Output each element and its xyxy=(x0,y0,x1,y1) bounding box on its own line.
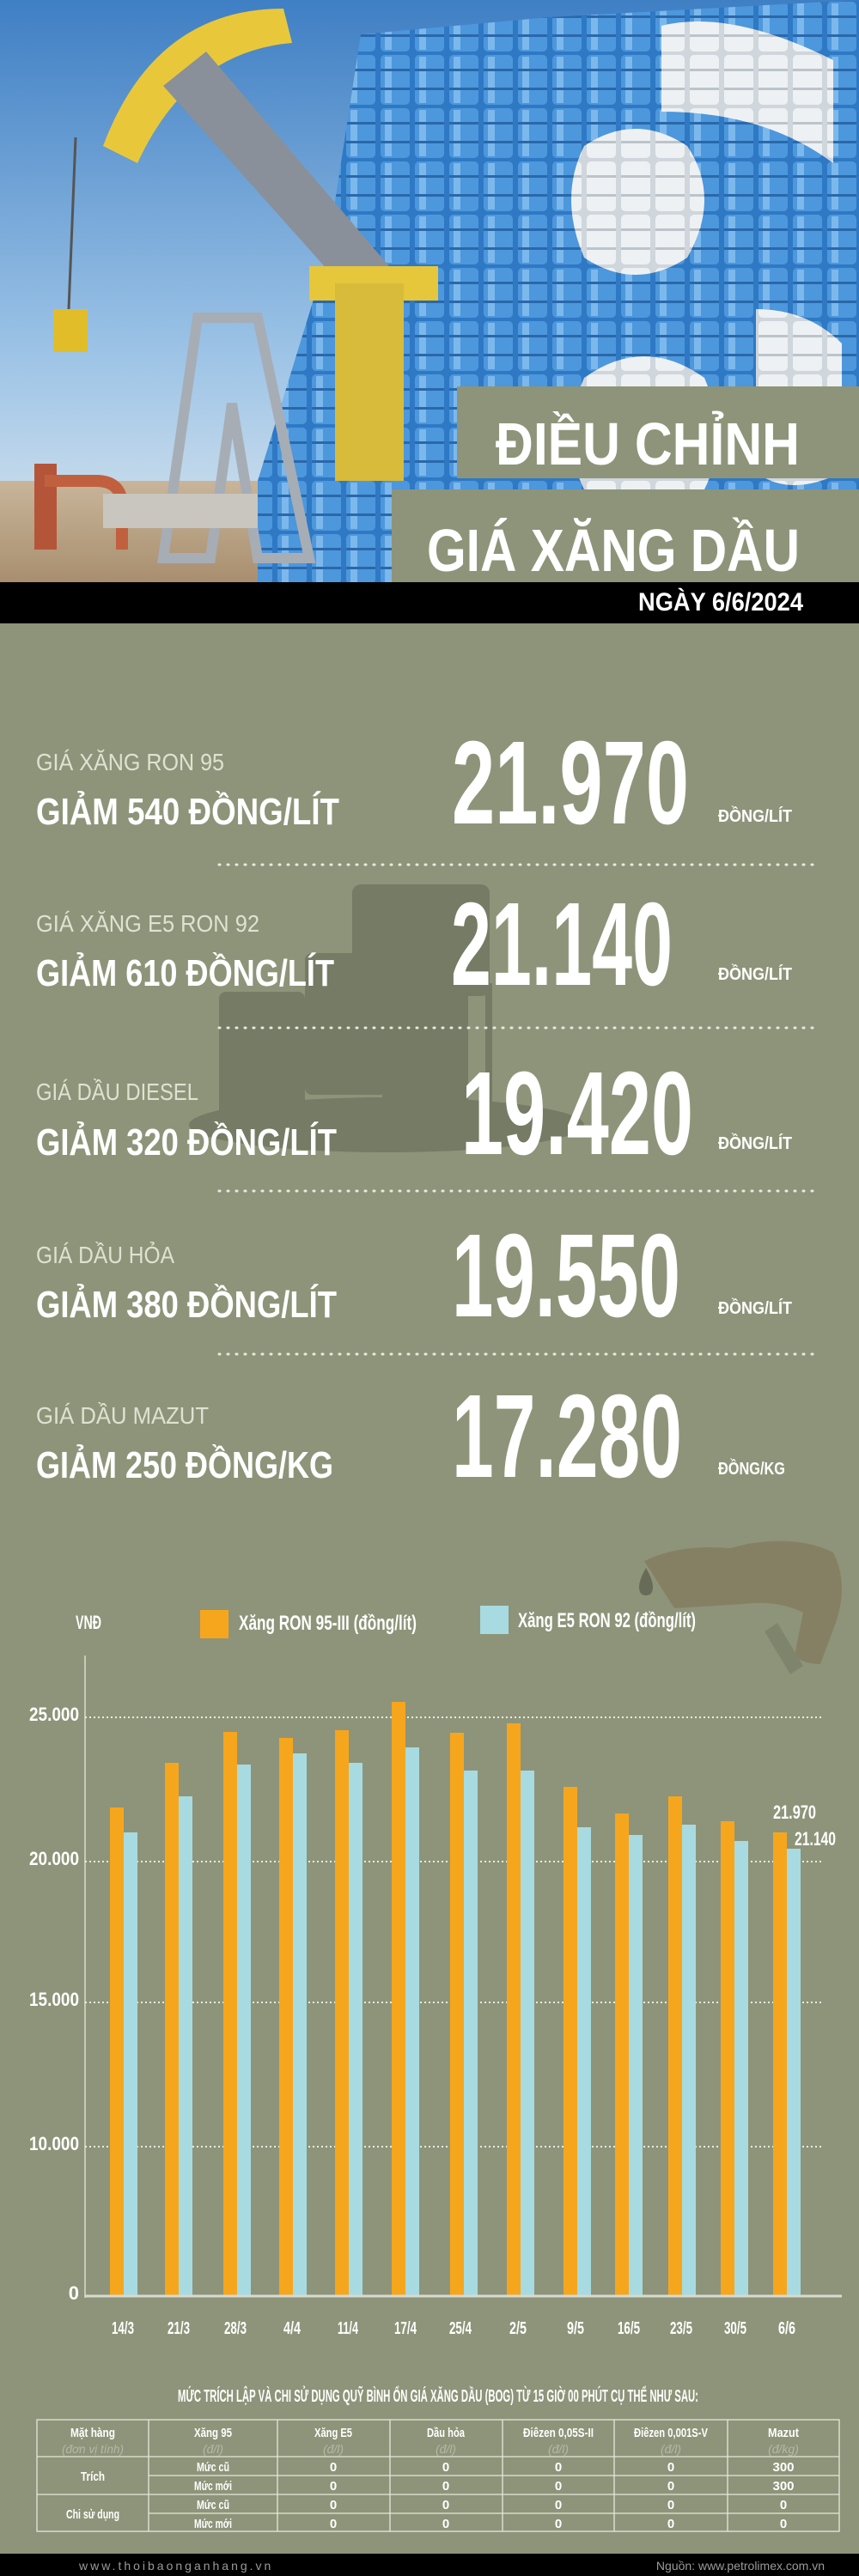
bar chart: 30/5 xyxy=(724,2319,746,2338)
table: stabilization fund: Mức mới xyxy=(194,2479,232,2494)
price row: kerosene: ĐỒNG/LÍT xyxy=(718,1297,792,1318)
table: stabilization fund: 300 xyxy=(772,2460,795,2475)
table: stabilization fund: Mazut xyxy=(768,2426,799,2440)
bar chart: 16/5 xyxy=(618,2319,640,2338)
footer: www.thoibaonganhang.vn xyxy=(78,2559,273,2573)
price row: kerosene xyxy=(36,1210,792,1342)
price row: diesel: GIẢM 320 ĐỒNG/LÍT xyxy=(36,1121,337,1163)
table: stabilization fund: (đ/l) xyxy=(203,2442,223,2456)
table: stabilization fund: Dầu hỏa xyxy=(427,2426,465,2440)
background illustration: oil barrels xyxy=(189,884,584,1152)
bar chart: 0 xyxy=(69,2282,79,2304)
chart legend: Xăng RON 95-III (đồng/lít) xyxy=(239,1612,417,1635)
price row: diesel xyxy=(36,1048,792,1180)
table: stabilization fund: 0 xyxy=(780,2498,787,2512)
bar chart: 28/3 xyxy=(224,2319,247,2338)
bar chart: 14/3 xyxy=(112,2319,134,2338)
price row: mazut: ĐỒNG/KG xyxy=(718,1458,785,1479)
price row: E5 RON 92: 21.140 xyxy=(451,878,673,1011)
table: stabilization fund: 300 xyxy=(772,2479,795,2494)
price row: mazut: 17.280 xyxy=(452,1370,682,1503)
chart legend: Xăng E5 RON 92 (đồng/lít) xyxy=(518,1609,696,1632)
table: stabilization fund: Xăng E5 xyxy=(314,2426,352,2440)
dotted separators xyxy=(219,865,816,1354)
bar chart: 21.140 xyxy=(795,1828,836,1850)
table: stabilization fund: 0 xyxy=(330,2498,337,2512)
price row: diesel: 19.420 xyxy=(461,1048,693,1180)
table: stabilization fund: Mức cũ xyxy=(197,2460,229,2475)
table: stabilization fund: 0 xyxy=(667,2460,674,2475)
table: stabilization fund: (đ/l) xyxy=(661,2442,681,2456)
bar chart: 21/3 xyxy=(168,2319,190,2338)
table: stabilization fund: (đ/l) xyxy=(323,2442,344,2456)
date band: NGÀY 6/6/2024 xyxy=(638,587,803,617)
price row: E5 RON 92 xyxy=(36,878,792,1011)
bar chart: 20.000 xyxy=(29,1848,79,1869)
bar chart: 25.000 xyxy=(29,1704,79,1725)
bar chart: 21.970 xyxy=(773,1801,816,1823)
price row: mazut: GIẢM 250 ĐỒNG/KG xyxy=(36,1443,333,1486)
price row: E5 RON 92: GIÁ XĂNG E5 RON 92 xyxy=(36,910,259,937)
table: stabilization fund: 0 xyxy=(667,2517,674,2531)
table: stabilization fund: (đ/l) xyxy=(548,2442,569,2456)
bar chart: 23/5 xyxy=(670,2319,692,2338)
table: stabilization fund: 0 xyxy=(555,2517,562,2531)
table: stabilization fund: 0 xyxy=(442,2517,449,2531)
price row: mazut: GIÁ DẦU MAZUT xyxy=(36,1402,209,1429)
bar chart: 6/6 xyxy=(778,2319,795,2338)
table: stabilization fund: 0 xyxy=(555,2498,562,2512)
footer: Nguồn: www.petrolimex.com.vn xyxy=(656,2559,825,2573)
price row: RON 95: 21.970 xyxy=(452,717,689,849)
title box line 2: GIÁ XĂNG DẦU xyxy=(427,517,800,584)
table: stabilization fund: 0 xyxy=(330,2460,337,2475)
bar chart xyxy=(29,1656,842,2338)
price row: kerosene: GIẢM 380 ĐỒNG/LÍT xyxy=(36,1283,337,1326)
table: stabilization fund: Xăng 95 xyxy=(194,2426,232,2440)
table: stabilization fund: Điêzen 0,001S-V xyxy=(634,2426,708,2440)
table: stabilization fund: 0 xyxy=(667,2479,674,2494)
bar chart: 9/5 xyxy=(567,2319,584,2338)
table: stabilization fund: Trích xyxy=(81,2470,105,2484)
bar chart: 11/4 xyxy=(338,2319,359,2338)
bar chart: 2/5 xyxy=(509,2319,527,2338)
bar chart: 15.000 xyxy=(29,1989,79,2010)
table: stabilization fund: (đ/kg) xyxy=(768,2442,799,2456)
price row: RON 95: GIẢM 540 ĐỒNG/LÍT xyxy=(36,790,339,833)
table: stabilization fund: 0 xyxy=(667,2498,674,2512)
table: stabilization fund: Mặt hàng xyxy=(70,2426,115,2440)
bar chart: 17/4 xyxy=(394,2319,417,2338)
bar chart: 10.000 xyxy=(29,2133,79,2154)
table: stabilization fund: 0 xyxy=(442,2479,449,2494)
table: stabilization fund: 0 xyxy=(330,2517,337,2531)
table: stabilization fund: 0 xyxy=(442,2460,449,2475)
price row: RON 95: GIÁ XĂNG RON 95 xyxy=(36,749,224,775)
table: stabilization fund: Điêzen 0,05S-II xyxy=(523,2426,594,2440)
price row: diesel: GIÁ DẦU DIESEL xyxy=(36,1078,198,1105)
table: stabilization fund: 0 xyxy=(555,2460,562,2475)
table: stabilization fund xyxy=(37,2420,839,2531)
bar chart: 4/4 xyxy=(283,2319,302,2338)
footer xyxy=(0,2554,859,2576)
title box line 1: ĐIỀU CHỈNH xyxy=(496,410,800,477)
chart legend: VNĐ xyxy=(76,1612,101,1633)
price row: kerosene: 19.550 xyxy=(452,1210,680,1342)
price row: E5 RON 92: ĐỒNG/LÍT xyxy=(718,963,792,984)
table: stabilization fund: 0 xyxy=(555,2479,562,2494)
title box line 1 xyxy=(457,386,859,478)
table: stabilization fund: Mức cũ xyxy=(197,2498,229,2512)
price row: E5 RON 92: GIẢM 610 ĐỒNG/LÍT xyxy=(36,951,334,994)
price row: diesel: ĐỒNG/LÍT xyxy=(718,1133,792,1153)
table: stabilization fund: Chi sử dụng xyxy=(66,2507,119,2522)
chart legend xyxy=(76,1606,696,1638)
table: stabilization fund: 0 xyxy=(330,2479,337,2494)
price row: mazut xyxy=(36,1370,785,1503)
bar chart: 25/4 xyxy=(449,2319,472,2338)
table: stabilization fund: 0 xyxy=(442,2498,449,2512)
price row: kerosene: GIÁ DẦU HỎA xyxy=(36,1241,174,1268)
table: stabilization fund: 0 xyxy=(780,2517,787,2531)
table: stabilization fund: Mức mới xyxy=(194,2517,232,2531)
table: stabilization fund: (đơn vị tính) xyxy=(62,2442,124,2456)
date band xyxy=(0,582,859,623)
table: stabilization fund: (đ/l) xyxy=(436,2442,456,2456)
price row: RON 95 xyxy=(36,717,792,849)
title box line 2 xyxy=(392,489,859,584)
icon: fuel nozzle xyxy=(639,1541,842,1674)
price row: RON 95: ĐỒNG/LÍT xyxy=(718,805,792,826)
header photo: oil pump and OPEC barrels xyxy=(0,0,859,584)
